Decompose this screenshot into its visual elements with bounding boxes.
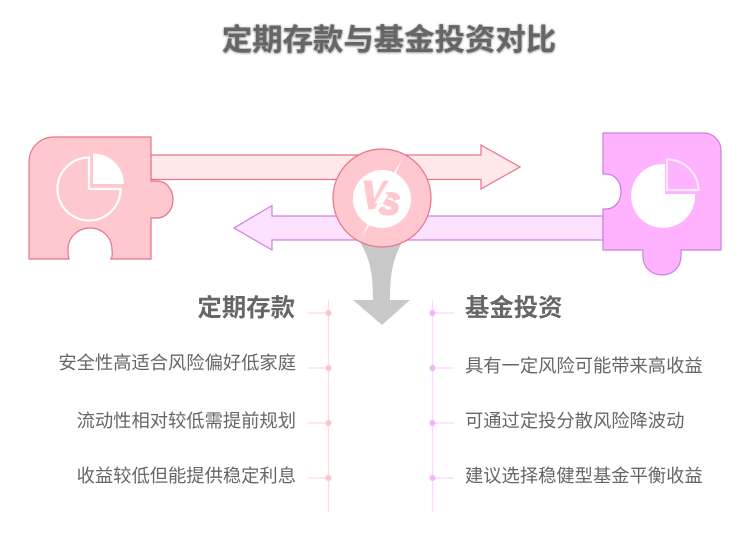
title: 定期存款与基金投资对比 bbox=[222, 23, 556, 57]
timeline: fixed deposit bbox=[308, 300, 332, 512]
list: fixed deposit points: 流动性相对较低需提前规划 bbox=[77, 410, 296, 431]
list: fund investment points: 可通过定投分散风险降波动 bbox=[465, 410, 684, 431]
icon: VS mark: S bbox=[379, 188, 399, 221]
arrow: left arrow (purple) bbox=[234, 206, 603, 250]
VS badge bbox=[333, 149, 431, 247]
list: fund investment points: 具有一定风险可能带来高收益 bbox=[465, 355, 703, 376]
icon: VS mark: V bbox=[362, 175, 390, 217]
list: fund investment points bbox=[465, 355, 703, 486]
icon: pie chart outline bbox=[58, 153, 124, 221]
puzzle piece: fixed deposit bbox=[29, 137, 173, 259]
timeline: fund investment bbox=[430, 300, 454, 512]
puzzle piece: fund investment bbox=[603, 133, 721, 275]
heading: fixed deposit: 定期存款 bbox=[197, 295, 295, 322]
icon: pie chart solid bbox=[631, 160, 698, 228]
arrow: right arrow (pink) bbox=[151, 145, 520, 189]
icon: VS mark bbox=[353, 159, 411, 238]
list: fixed deposit points bbox=[58, 352, 296, 486]
list: fixed deposit points: 收益较低但能提供稳定利息 bbox=[77, 465, 296, 486]
list: fund investment points: 建议选择稳健型基金平衡收益 bbox=[465, 465, 703, 486]
heading: fund investment: 基金投资 bbox=[465, 294, 563, 322]
arrow: grey down arrow bbox=[353, 242, 410, 325]
list: fixed deposit points: 安全性高适合风险偏好低家庭 bbox=[58, 352, 296, 373]
title: 定期存款与基金投资对比 bbox=[222, 24, 556, 58]
